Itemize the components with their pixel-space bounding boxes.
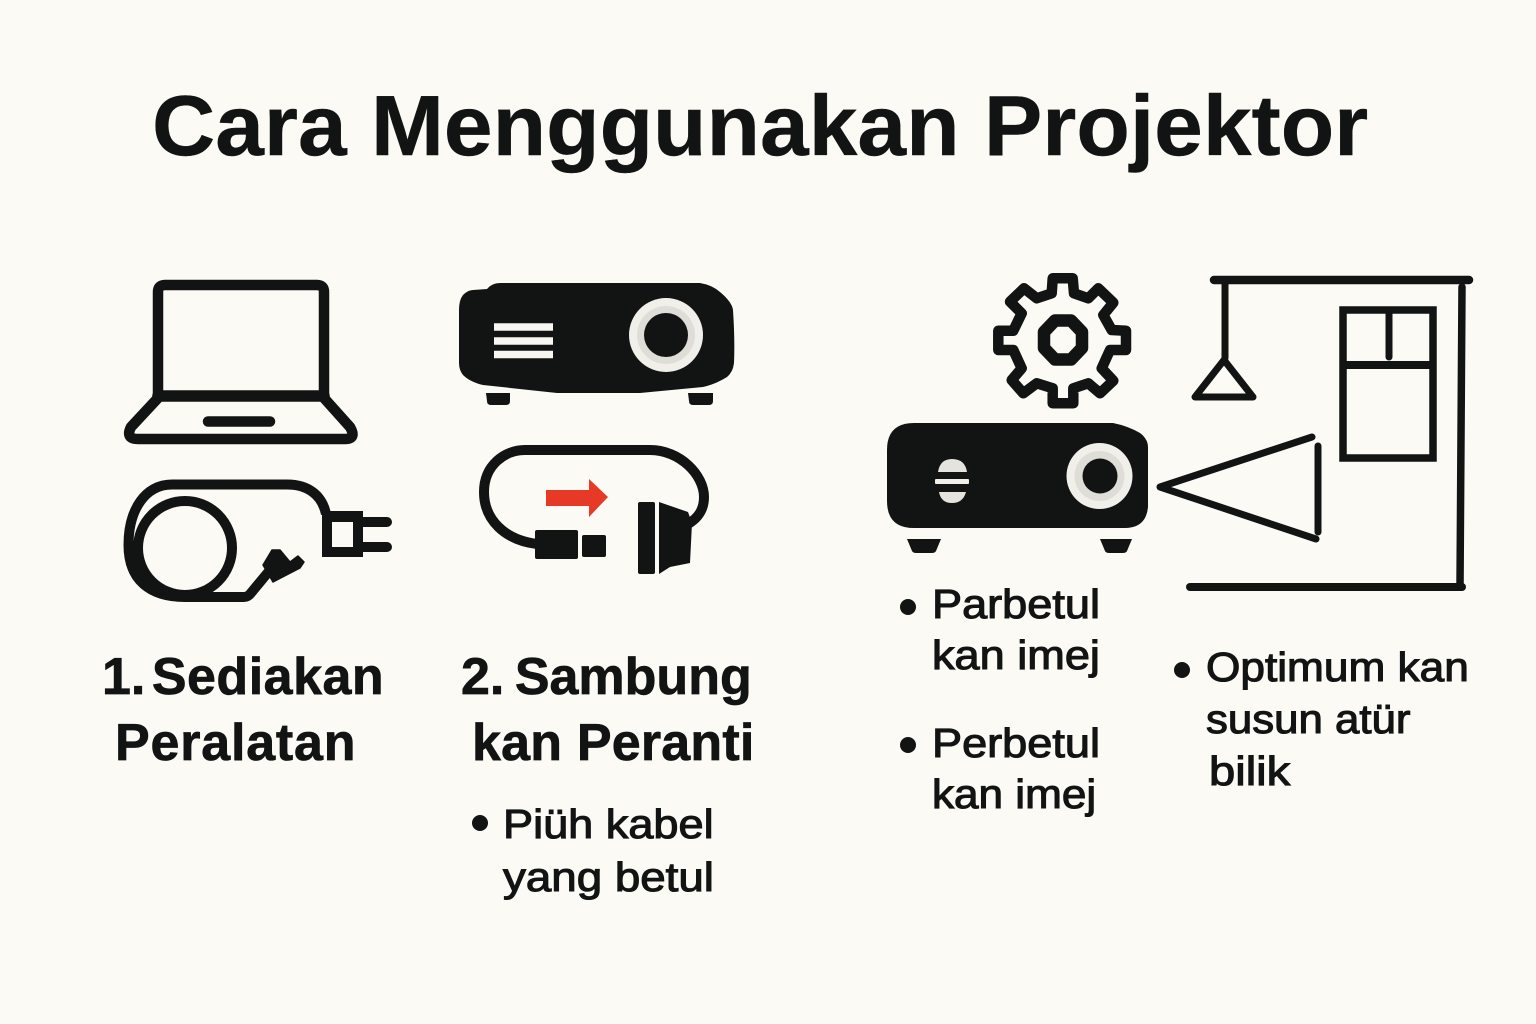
text: room bullet: bilik [1209,748,1290,794]
text: adjust image bullet 2 [932,720,1100,817]
icon: projector bottom [887,423,1148,553]
text: adjust image bullet 2: kan imej [932,771,1096,817]
icon: projector top [459,283,734,405]
text: adjust image bullet 1: Parbetul [932,581,1100,627]
heading: step 2 [461,648,755,772]
heading: step 1: 1. Sediakan [102,648,384,706]
text: adjust image bullet 1 [932,581,1100,678]
text: room bullet: Optimum kan [1206,644,1469,690]
icon: red arrow [546,479,608,517]
bullets [472,599,1190,831]
title: Cara Menggunakan Projektor [152,79,1368,174]
icon: room with projection [1160,280,1469,587]
heading: step 2: kan Peranti [472,714,755,772]
text: cable bullet: Piüh kabel [503,801,714,847]
icon: power cable [128,484,387,597]
heading: step 1 [102,648,384,772]
icon: cable connection [484,450,704,574]
text: cable bullet: yang betul [503,854,714,900]
text: adjust image bullet 2: Perbetul [932,720,1100,766]
text: adjust image bullet 1: kan imej [932,632,1100,678]
text: room bullet [1206,644,1469,794]
heading: step 1: Peralatan [115,714,356,772]
icon: gear [998,278,1126,403]
text: cable bullet [502,801,714,900]
text: room bullet: susun atür [1206,696,1410,742]
heading: step 2: 2. Sambung [461,648,752,706]
icon: laptop [129,285,353,439]
